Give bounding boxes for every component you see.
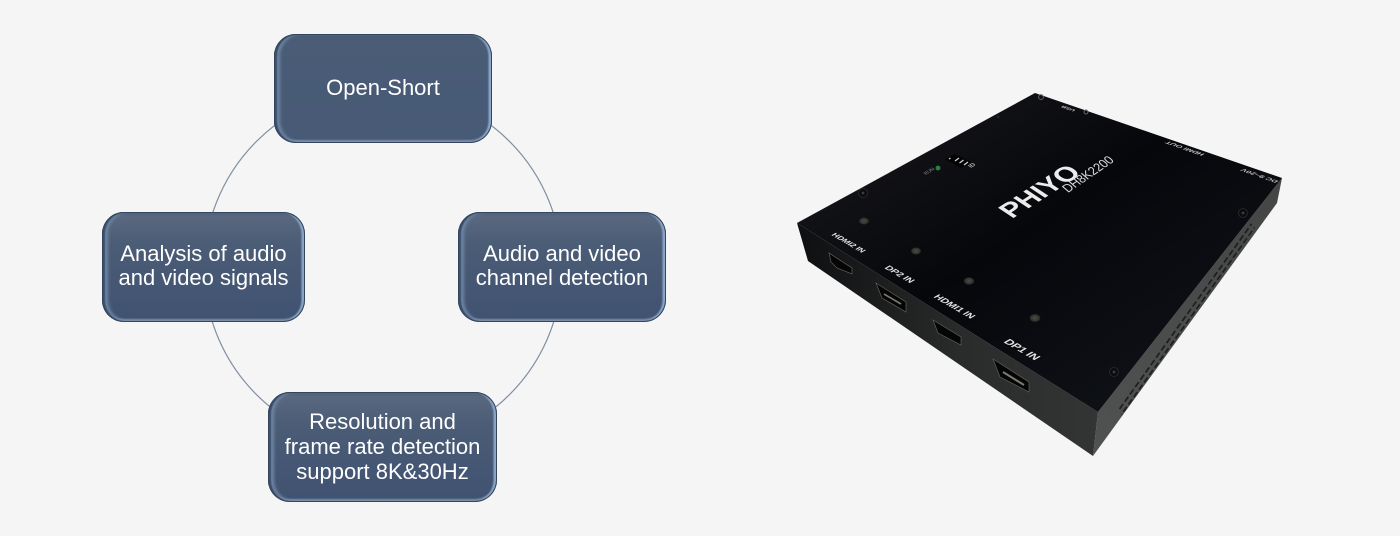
- node: Resolution and frame rate detection: Resolution and: [309, 408, 456, 434]
- front port labels: DP2 IN: [882, 264, 917, 284]
- rear port labels: HDMI OUT: [1163, 140, 1206, 156]
- DIP switch and LED: ID: [968, 162, 978, 169]
- rear icons: [1039, 95, 1088, 114]
- node: Analysis of audio and video signals: Analysis of audio: [120, 241, 287, 266]
- screws and feet: [858, 116, 1248, 376]
- device front side: [797, 223, 1098, 456]
- DIP switch and LED: [923, 154, 978, 176]
- node: Analysis of audio and video signals: and video signals: [118, 265, 288, 290]
- rear port labels: DC 9~20V: [1239, 168, 1280, 183]
- front port labels: HDMI1 IN: [930, 293, 977, 320]
- device right side with vents: [1093, 178, 1282, 456]
- node: Audio and video channel detection: [458, 212, 666, 322]
- node: Audio and video channel detection: Audio and video: [483, 241, 641, 266]
- front ports: [829, 253, 1029, 392]
- node: Resolution and frame rate detection: support 8K&30Hz: [296, 458, 469, 484]
- brand logo: PHIYO: [992, 160, 1088, 222]
- DIP switch and LED: RUN: [923, 167, 937, 176]
- rear port labels: USB: [1060, 105, 1077, 112]
- node: Audio and video channel detection: channel detection: [476, 265, 648, 290]
- front port labels: HDMI2 IN: [829, 232, 868, 254]
- front port labels: [829, 232, 1042, 362]
- node: Resolution and frame rate detection: [268, 392, 497, 502]
- node: Analysis of audio and video signals: [102, 212, 305, 322]
- node: Open-Short: Open-Short: [326, 75, 440, 100]
- node: Open-Short: [274, 34, 492, 143]
- model name: DH8K2200: [1059, 153, 1117, 195]
- rear port labels: [1060, 105, 1280, 183]
- device top face: [797, 93, 1282, 412]
- front port labels: DP1 IN: [1000, 338, 1042, 362]
- node: Resolution and frame rate detection: frame rate detection: [285, 434, 480, 458]
